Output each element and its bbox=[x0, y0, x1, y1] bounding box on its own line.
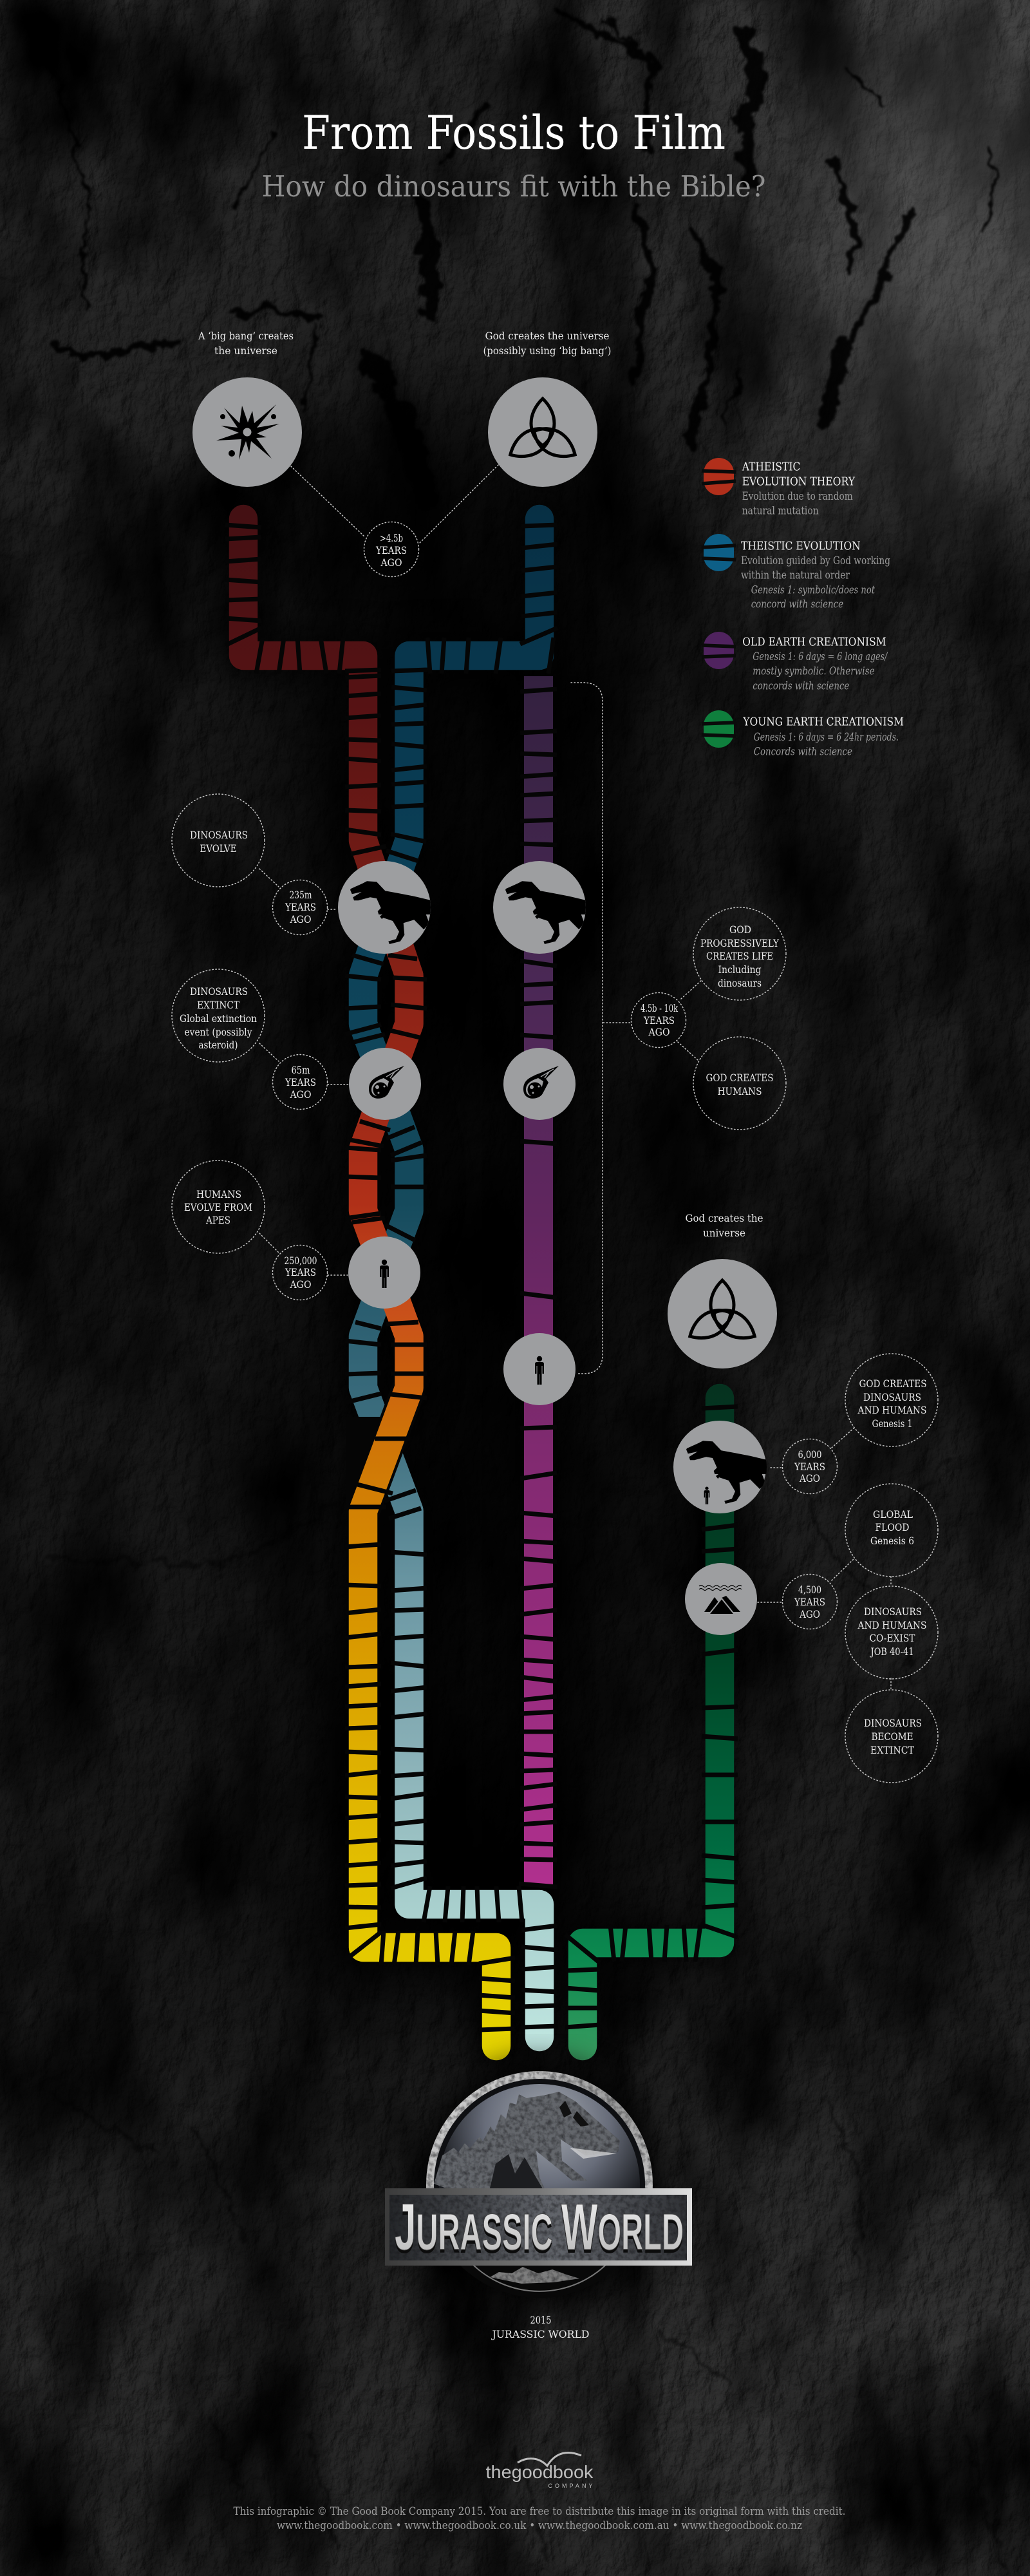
footer: copyright bbox=[233, 2505, 846, 2532]
legend item: theistic evolution: THEISTIC EVOLUTION bbox=[741, 539, 861, 553]
connector bbox=[259, 1043, 348, 1084]
callout: dinosaurs evolve bbox=[172, 794, 265, 887]
legend item: theistic evolution: Genesis 1: symbolic/does not bbox=[751, 583, 875, 596]
bracket: old earth span bbox=[571, 683, 603, 1374]
label: god creates the universe, young earth bbox=[685, 1212, 763, 1239]
legend item: atheistic evolution bbox=[702, 458, 856, 516]
logo: Jurassic World bbox=[385, 2059, 692, 2310]
callout: dinosaurs extinct bbox=[172, 969, 265, 1062]
callout: god creates humans: HUMANS bbox=[717, 1085, 762, 1097]
legend item: young earth creationism: YOUNG EARTH CREATIONISM bbox=[742, 715, 904, 729]
label: big bang bbox=[198, 330, 294, 357]
icon: dinosaur circle purple bbox=[493, 861, 587, 954]
callout: god creates dinosaurs and humans: GOD CREATES bbox=[859, 1378, 927, 1390]
date: over 4.5b years ago bbox=[364, 522, 418, 577]
callout: god progressively creates life bbox=[693, 907, 786, 1000]
icon: trinity knot young earth bbox=[668, 1259, 777, 1368]
logo: the good book company bbox=[485, 2452, 594, 2489]
label: god creates the universe: (possibly using ‘big bang’) bbox=[483, 345, 612, 357]
label: big bang: A ‘big bang’ creates bbox=[198, 330, 294, 342]
icon: comet purple bbox=[503, 1048, 576, 1120]
date: 65m: AGO bbox=[290, 1088, 312, 1101]
caption: 2015 Jurassic World: 2015 bbox=[530, 2314, 551, 2326]
legend item: atheistic evolution: Evolution due to random bbox=[742, 490, 853, 502]
callout: dinosaurs become extinct: DINOSAURS bbox=[864, 1717, 922, 1729]
legend item: theistic evolution: within the natural order bbox=[741, 569, 850, 582]
callout: global flood: GLOBAL bbox=[873, 1508, 913, 1520]
footer: copyright: This infographic © The Good Book Company 2015. You are free to distribute this image in its original form with this credit. bbox=[233, 2505, 846, 2518]
date: 6,000: AGO bbox=[799, 1472, 820, 1484]
caption: 2015 Jurassic World: JURASSIC WORLD bbox=[491, 2328, 590, 2340]
callout: humans evolve: HUMANS bbox=[196, 1188, 241, 1200]
icon: trinity knot bbox=[488, 377, 597, 487]
icon: human purple bbox=[503, 1333, 576, 1405]
date: 4,500: 4,500 bbox=[798, 1584, 821, 1596]
icon: flood over mountains bbox=[685, 1563, 757, 1635]
date: 250,000: YEARS bbox=[285, 1266, 316, 1278]
callout: dinosaurs become extinct bbox=[845, 1690, 938, 1783]
callout: dinosaurs become extinct: EXTINCT bbox=[870, 1744, 914, 1756]
callout: god progressively creates life: CREATES LIFE bbox=[706, 950, 773, 962]
date: 65m bbox=[273, 1055, 327, 1109]
label: big bang: the universe bbox=[214, 345, 277, 357]
legend item: atheistic evolution: ATHEISTIC bbox=[742, 460, 800, 474]
connector bbox=[758, 1428, 891, 1689]
legend item: theistic evolution bbox=[702, 534, 890, 611]
date: 235m: YEARS bbox=[285, 901, 316, 913]
callout: dinosaurs extinct: Global extinction bbox=[180, 1012, 257, 1025]
date: 250,000: 250,000 bbox=[285, 1255, 317, 1267]
callout: dinosaurs extinct: event (possibly bbox=[184, 1026, 252, 1038]
date: 235m bbox=[273, 880, 327, 935]
icon: dinosaur and human bbox=[673, 1421, 768, 1513]
ribbon shadow bbox=[243, 519, 720, 2046]
callout: god creates dinosaurs and humans: DINOSAURS bbox=[863, 1391, 921, 1403]
logo: the good book company: thegoodbook bbox=[485, 2462, 594, 2482]
callout: dinosaurs and humans co-exist: AND HUMANS bbox=[857, 1619, 927, 1631]
date: 65m: 65m bbox=[291, 1064, 310, 1076]
legend item: old earth creationism: mostly symbolic. Otherwise bbox=[753, 665, 875, 677]
subtitle: How do dinosaurs fit with the Bible? bbox=[261, 169, 766, 204]
label: god creates the universe, young earth: God creates the bbox=[685, 1212, 763, 1224]
icon: dinosaur circle left bbox=[338, 861, 432, 954]
legend item: atheistic evolution: EVOLUTION THEORY bbox=[742, 475, 856, 488]
callout: dinosaurs extinct: DINOSAURS bbox=[190, 985, 248, 998]
ribbon: blue theistic evolution bbox=[345, 519, 557, 2037]
connector bbox=[259, 1233, 348, 1275]
ribbon: purple old earth creationism bbox=[519, 676, 557, 1887]
callout: dinosaurs become extinct: BECOME bbox=[872, 1730, 913, 1743]
date: 65m: YEARS bbox=[285, 1076, 316, 1088]
callout: humans evolve: EVOLVE FROM bbox=[184, 1201, 252, 1213]
callout: dinosaurs and humans co-exist bbox=[845, 1586, 938, 1679]
callout: god creates dinosaurs and humans: Genesis 1 bbox=[872, 1417, 913, 1430]
legend item: theistic evolution: Evolution guided by God working bbox=[741, 554, 890, 567]
date: 4.5b - 10k: AGO bbox=[648, 1026, 670, 1038]
date: 235m: 235m bbox=[290, 889, 312, 901]
legend item: young earth creationism: Concords with science bbox=[754, 745, 852, 757]
legend item: atheistic evolution: natural mutation bbox=[742, 504, 819, 516]
date: 6,000: 6,000 bbox=[798, 1448, 821, 1461]
callout: dinosaurs and humans co-exist: CO-EXIST bbox=[869, 1632, 915, 1644]
legend item: old earth creationism: OLD EARTH CREATIONISM bbox=[742, 635, 886, 649]
legend item: young earth creationism: Genesis 1: 6 days = 6 24hr periods. bbox=[754, 731, 899, 743]
callout: god progressively creates life: dinosaurs bbox=[718, 977, 762, 989]
title: From Fossils to Film bbox=[302, 106, 726, 160]
callout: god creates humans bbox=[693, 1037, 786, 1130]
legend item: theistic evolution: concord with science bbox=[751, 598, 843, 611]
callout: global flood bbox=[845, 1484, 938, 1577]
callout: god progressively creates life: PROGRESSIVELY bbox=[700, 937, 779, 949]
icon: comet left bbox=[349, 1048, 421, 1120]
date: 6,000: YEARS bbox=[794, 1461, 825, 1473]
callout: god creates humans: GOD CREATES bbox=[706, 1072, 774, 1084]
date: 235m: AGO bbox=[290, 913, 312, 925]
date: 4,500: AGO bbox=[799, 1608, 820, 1620]
legend item: old earth creationism: concords with science bbox=[753, 679, 849, 692]
callout: dinosaurs and humans co-exist: DINOSAURS bbox=[864, 1605, 922, 1618]
callout: god progressively creates life: GOD bbox=[729, 923, 751, 936]
label: god creates the universe, young earth: universe bbox=[703, 1227, 745, 1239]
date: 4.5b - 10k: 4.5b - 10k bbox=[641, 1002, 678, 1014]
legend item: old earth creationism bbox=[702, 632, 888, 692]
legend item: young earth creationism bbox=[702, 710, 904, 757]
date: 4.5b - 10k: YEARS bbox=[643, 1014, 675, 1027]
date: 4,500 bbox=[783, 1574, 837, 1629]
label: god creates the universe: God creates the universe bbox=[485, 330, 609, 342]
date: over 4.5b years ago: AGO bbox=[380, 556, 402, 569]
ribbon: red atheistic evolution to yellow bbox=[225, 519, 515, 2046]
date: over 4.5b years ago: >4.5b bbox=[380, 532, 403, 544]
callout: global flood: FLOOD bbox=[876, 1521, 909, 1533]
ribbon: green young earth creationism bbox=[565, 1398, 738, 2046]
legend item: old earth creationism: Genesis 1: 6 days = 6 long ages/ bbox=[753, 650, 888, 663]
legend bbox=[702, 458, 904, 757]
logo: the good book company: COMPANY bbox=[548, 2483, 592, 2489]
callout: dinosaurs evolve: DINOSAURS bbox=[190, 829, 248, 841]
callout: god creates dinosaurs and humans bbox=[845, 1354, 938, 1446]
callout: humans evolve bbox=[172, 1160, 265, 1253]
icon: big bang bbox=[192, 377, 302, 487]
callout: dinosaurs extinct: asteroid) bbox=[198, 1039, 238, 1051]
connector: big bang to years bbox=[291, 466, 364, 536]
connector: god to years bbox=[420, 465, 498, 543]
callout: dinosaurs evolve: EVOLVE bbox=[200, 842, 237, 855]
logo: Jurassic World: JURASSIC WORLD bbox=[395, 2193, 684, 2267]
callout: humans evolve: APES bbox=[205, 1214, 230, 1226]
connector bbox=[259, 869, 337, 909]
date: 6,000 bbox=[783, 1439, 837, 1494]
callout: global flood: Genesis 6 bbox=[870, 1535, 914, 1547]
footer: copyright: www.thegoodbook.com • www.thegoodbook.co.uk • www.thegoodbook.com.au • www.thegoodbook.co.nz bbox=[277, 2519, 802, 2532]
callout: dinosaurs and humans co-exist: JOB 40-41 bbox=[870, 1645, 914, 1658]
label: god creates the universe bbox=[483, 330, 612, 357]
callout: god progressively creates life: Including bbox=[718, 963, 761, 976]
date: 4,500: YEARS bbox=[794, 1596, 825, 1608]
icon: human left bbox=[348, 1236, 420, 1309]
date: 4.5b - 10k bbox=[631, 993, 686, 1047]
caption: 2015 Jurassic World bbox=[491, 2314, 590, 2340]
callout: dinosaurs extinct: EXTINCT bbox=[197, 999, 239, 1011]
callout: god creates dinosaurs and humans: AND HUMANS bbox=[857, 1404, 927, 1416]
logo: Jurassic World: JURASSIC WORLD bbox=[395, 2190, 684, 2264]
date: 250,000 bbox=[273, 1245, 327, 1300]
connector bbox=[603, 980, 702, 1061]
date: 250,000: AGO bbox=[290, 1278, 312, 1291]
date: over 4.5b years ago: YEARS bbox=[375, 544, 407, 556]
